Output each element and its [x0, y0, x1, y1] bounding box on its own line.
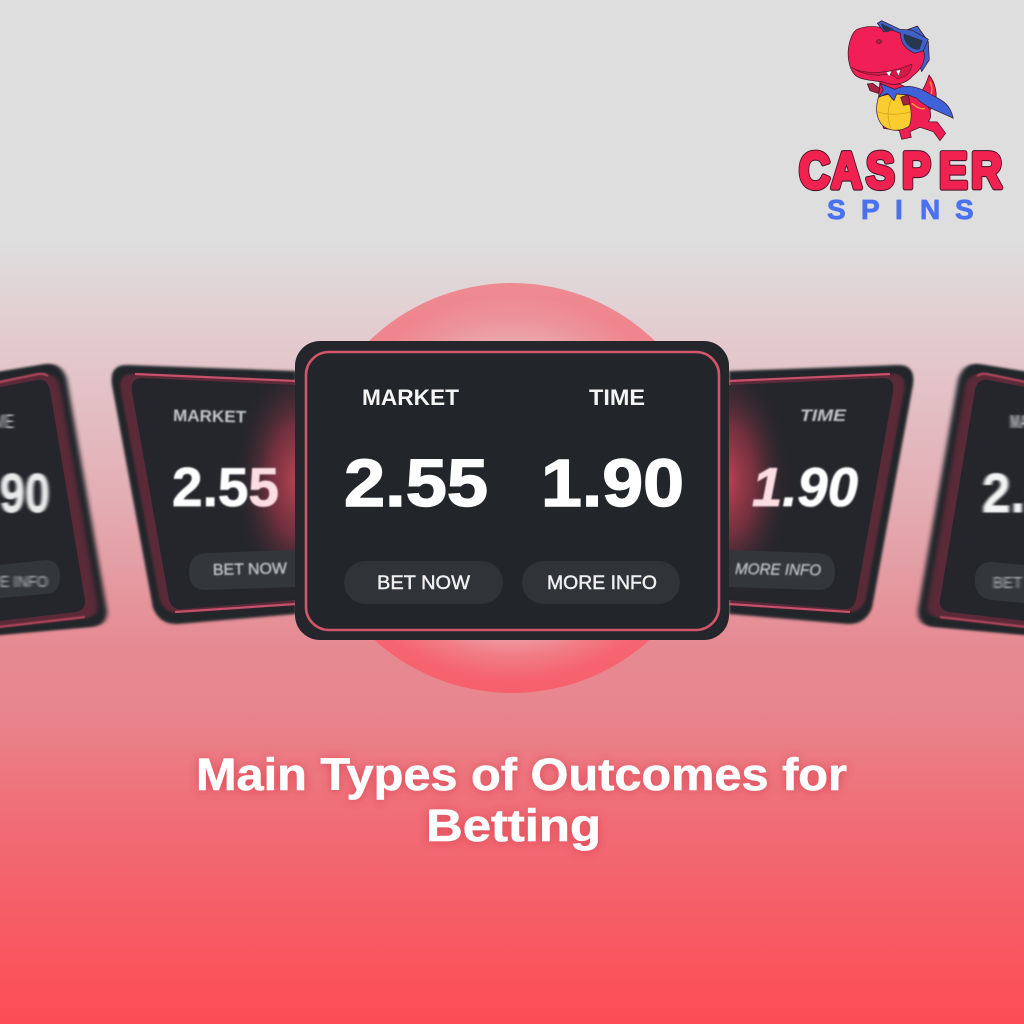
left card odds: 2.55 — [172, 456, 279, 518]
market heading: MARKET — [362, 385, 460, 410]
right card button label: MORE INFO — [735, 561, 821, 580]
panel: left tilted card — [112, 365, 296, 624]
panel: central odds card — [295, 341, 729, 640]
right card time label: TIME — [800, 406, 847, 425]
logo wordmark: Casper: CASPER — [799, 142, 1002, 199]
sunglasses — [877, 21, 928, 53]
bet now button — [344, 561, 503, 604]
arms — [867, 83, 880, 93]
spines — [907, 26, 929, 72]
logo wordmark: Spins: SPINS — [827, 194, 974, 225]
left card market label: MARKET — [173, 406, 247, 427]
blue cape — [879, 83, 953, 118]
right card odds: 1.90 — [752, 456, 858, 518]
far left labels — [0, 412, 50, 591]
tail — [913, 75, 936, 115]
far right pill button — [975, 562, 1024, 604]
panel: right tilted card — [729, 365, 913, 624]
bet now button: BET NOW — [377, 573, 470, 594]
mouth — [852, 64, 912, 79]
panel: far left blurred card — [0, 364, 107, 636]
far right labels — [982, 412, 1024, 592]
logo wordmark: Casper: CASPER — [799, 142, 1002, 199]
yellow belly shell — [877, 91, 911, 130]
panel: far right blurred card — [918, 364, 1024, 636]
logo: Casper Spins — [799, 21, 1002, 225]
red glow at inner edge — [232, 382, 296, 604]
pink orb behind cards — [307, 283, 717, 693]
far left pill button — [0, 560, 60, 599]
title: Main Types of Outcomes for — [196, 749, 847, 800]
more info button: MORE INFO — [547, 573, 657, 594]
time heading: TIME — [589, 385, 645, 410]
more info button — [522, 561, 680, 604]
left card button label: BET NOW — [213, 560, 288, 579]
time odds: 1.90 — [541, 446, 684, 521]
market odds: 2.55 — [344, 446, 488, 521]
title: Betting — [426, 800, 601, 851]
head — [848, 27, 924, 84]
nostril — [876, 40, 882, 44]
left card pill button — [189, 550, 296, 590]
title — [196, 749, 847, 851]
body and legs — [879, 80, 946, 141]
icon: red dinosaur mascot — [848, 21, 953, 141]
right card pill button — [729, 550, 835, 590]
